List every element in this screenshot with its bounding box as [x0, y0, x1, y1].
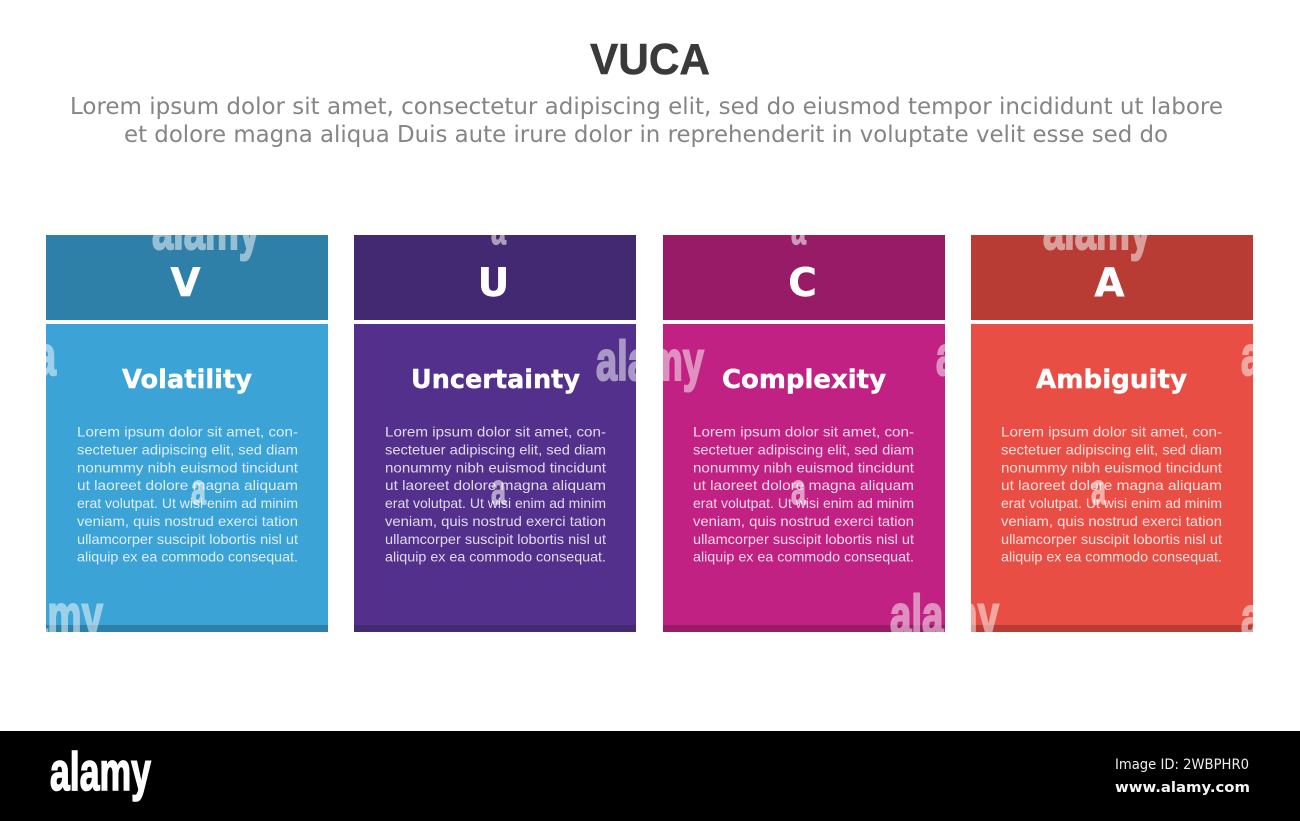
footer bar — [0, 731, 1300, 821]
image id: Image ID: 2WBPHR0 — [1115, 757, 1249, 773]
title: VUCA — [590, 35, 710, 84]
body: volatility: sectetuer adipiscing elit, sed diam — [77, 442, 298, 458]
body: ambiguity: Ambiguity — [1036, 365, 1187, 395]
body: volatility: aliquip ex ea commodo consequat. — [77, 549, 298, 565]
body: uncertainty: Lorem ipsum dolor sit amet, con- — [385, 424, 606, 440]
header: U — [354, 235, 636, 320]
watermarks: alamy — [596, 329, 704, 392]
body: uncertainty: veniam, quis nostrud exerci tation — [385, 513, 606, 529]
header: A: A — [1094, 261, 1125, 306]
body: complexity: aliquip ex ea commodo consequat. — [693, 549, 914, 565]
header: V — [46, 235, 328, 320]
body: volatility: nonummy nibh euismod tincidunt — [77, 459, 298, 475]
body: uncertainty: ullamcorper suscipit lobortis nisl ut — [385, 531, 606, 547]
body: ambiguity: ullamcorper suscipit lobortis nisl ut — [1001, 531, 1222, 547]
watermarks: alamy — [1043, 198, 1151, 261]
body: complexity: nonummy nibh euismod tincidunt — [693, 459, 914, 475]
header: C: C — [788, 261, 817, 306]
body: ambiguity: sectetuer adipiscing elit, sed diam — [1001, 442, 1222, 458]
body: uncertainty: ut laoreet dolore magna aliquam — [385, 477, 606, 493]
watermarks: a — [191, 465, 206, 514]
panel: ambiguity — [971, 235, 1253, 632]
body: uncertainty: nonummy nibh euismod tincidunt — [385, 459, 606, 475]
body: ambiguity: ut laoreet dolore magna aliquam — [1001, 477, 1222, 493]
panel: complexity — [663, 235, 945, 632]
watermarks: alamy — [890, 583, 999, 646]
header: U: U — [478, 261, 509, 306]
body: uncertainty — [354, 324, 636, 632]
panel: uncertainty — [354, 235, 636, 632]
body: volatility: Lorem ipsum dolor sit amet, con- — [77, 424, 298, 440]
body: complexity: erat volutpat. Ut wisi enim ad minim — [693, 495, 914, 511]
body: complexity: ut laoreet dolore magna aliquam — [693, 477, 914, 493]
body: uncertainty: Uncertainty — [411, 365, 580, 395]
subtitle: Lorem ipsum dolor sit amet, consectetur adipiscing elit, sed do eiusmod tempor incididunt ut labore — [70, 94, 1223, 120]
watermarks: a — [791, 465, 806, 514]
watermarks: a — [491, 465, 506, 514]
body: volatility: Volatility — [122, 365, 252, 395]
panel: volatility — [46, 235, 328, 632]
body: complexity: veniam, quis nostrud exerci tation — [693, 513, 914, 529]
watermarks: a — [1091, 465, 1106, 514]
watermarks — [0, 198, 1262, 648]
header: C — [663, 235, 945, 320]
body: ambiguity: aliquip ex ea commodo consequat. — [1001, 549, 1222, 565]
body: complexity: ullamcorper suscipit lobortis nisl ut — [693, 531, 914, 547]
body: ambiguity: erat volutpat. Ut wisi enim ad minim — [1001, 495, 1222, 511]
body: volatility — [46, 324, 328, 632]
body: uncertainty: sectetuer adipiscing elit, sed diam — [385, 442, 606, 458]
body: ambiguity: Lorem ipsum dolor sit amet, con- — [1001, 424, 1222, 440]
watermarks: a — [936, 324, 957, 387]
header: A — [971, 235, 1253, 320]
body: volatility: erat volutpat. Ut wisi enim ad minim — [77, 495, 298, 511]
body: complexity: Lorem ipsum dolor sit amet, con- — [693, 424, 914, 440]
watermarks: a — [791, 205, 806, 254]
website: www.alamy.com — [1115, 780, 1250, 796]
body: uncertainty: erat volutpat. Ut wisi enim ad minim — [385, 495, 606, 511]
body: volatility: veniam, quis nostrud exerci tation — [77, 513, 298, 529]
footer logo: alamy — [50, 742, 151, 802]
watermarks: alamy — [152, 198, 260, 261]
body: complexity: Complexity — [722, 365, 886, 395]
header: V: V — [170, 261, 201, 306]
body: complexity — [663, 324, 945, 632]
subtitle: et dolore magna aliqua Duis aute irure dolor in reprehenderit in voluptate velit esse sed do — [124, 122, 1168, 148]
subtitle — [70, 94, 1223, 148]
watermarks: a — [491, 205, 506, 254]
body: volatility: ullamcorper suscipit lobortis nisl ut — [77, 531, 298, 547]
body: ambiguity: nonummy nibh euismod tincidunt — [1001, 459, 1222, 475]
watermarks: a — [36, 324, 57, 387]
body: volatility: ut laoreet dolore magna aliquam — [77, 477, 298, 493]
body: ambiguity: veniam, quis nostrud exerci tation — [1001, 513, 1222, 529]
body: ambiguity — [971, 324, 1253, 632]
watermarks: a — [1241, 324, 1262, 387]
watermarks: a — [1241, 585, 1262, 648]
body: uncertainty: aliquip ex ea commodo consequat. — [385, 549, 606, 565]
body: complexity: sectetuer adipiscing elit, sed diam — [693, 442, 914, 458]
